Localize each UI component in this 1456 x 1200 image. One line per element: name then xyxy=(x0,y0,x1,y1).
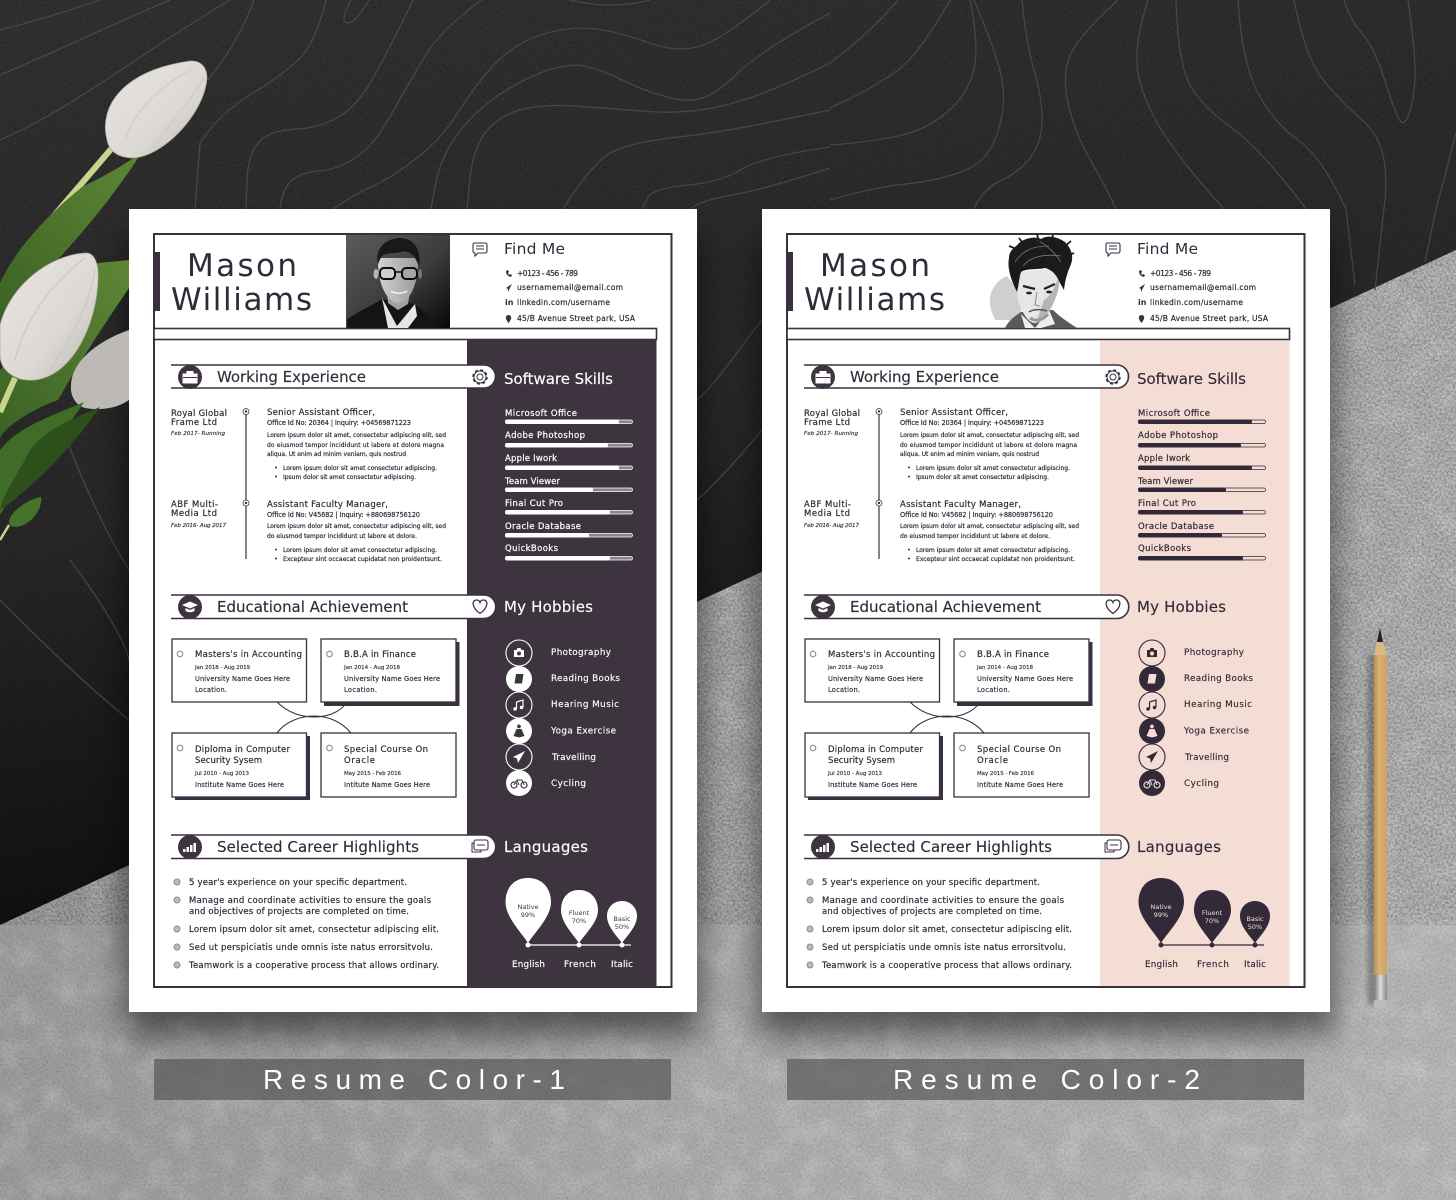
education card: special course: May 2015 - Feb 2016 xyxy=(977,771,1034,777)
language pins chart: 99% xyxy=(521,911,535,919)
hobbies list: Yoga Exercise xyxy=(550,726,616,736)
education card: bba: B.B.A in Finance xyxy=(977,650,1049,660)
experience timeline xyxy=(243,408,249,559)
language pins chart: Italic xyxy=(1244,960,1266,970)
education card: masters: Jan 2018 - Aug 2019 xyxy=(194,665,250,671)
experience entry 2: Lorem ipsum dolor sit amet, consectetur adipiscing elit, sed xyxy=(900,523,1079,530)
caption: resume color 1 xyxy=(154,1059,671,1100)
heading: languages: Languages xyxy=(1137,838,1221,856)
education card: masters: Masters's in Accounting xyxy=(828,650,935,660)
skills list: Apple Iwork xyxy=(1138,454,1190,464)
illustration: pencil xyxy=(1368,628,1387,1008)
experience entry 2: ABF Multi- xyxy=(171,500,218,510)
heading: my hobbies: My Hobbies xyxy=(504,598,593,616)
language pins chart: Basic xyxy=(1246,915,1264,923)
education card: special course: Oracle xyxy=(344,756,375,766)
hobbies list: Photography xyxy=(551,648,611,658)
header strip xyxy=(154,328,656,340)
header strip xyxy=(787,328,1290,340)
linkedin url: linkedin.com/username xyxy=(517,298,610,307)
section bar: career highlights xyxy=(171,835,496,859)
phone number: +0123 - 456 - 789 xyxy=(517,269,578,278)
background: dark textured diagonal xyxy=(0,0,1456,925)
heading: languages: Languages xyxy=(504,838,588,856)
education connectors xyxy=(277,702,351,733)
education card: special course xyxy=(321,733,456,797)
education card: bba: Jan 2014 - Aug 2018 xyxy=(343,665,400,671)
career highlights list: and objectives of projects are completed on time. xyxy=(189,907,409,917)
heading: find me: Find Me xyxy=(504,240,565,258)
skills list xyxy=(1137,409,1266,560)
language pins chart xyxy=(506,878,637,970)
education card: masters: Jan 2018 - Aug 2019 xyxy=(827,665,884,671)
experience entry 1: Frame Ltd xyxy=(171,418,217,428)
caption: resume color 1: Resume Color-1 xyxy=(263,1064,565,1095)
icon: speech bubble xyxy=(473,243,487,256)
icon: location pin xyxy=(506,315,511,323)
language pins chart: English xyxy=(512,960,545,970)
language pins chart: Native xyxy=(1150,903,1172,911)
icon: send xyxy=(1139,284,1145,292)
language pins chart: 70% xyxy=(572,917,586,925)
icon: speech bubble xyxy=(1106,243,1120,256)
language pins chart: 99% xyxy=(1154,911,1168,919)
skills list: Microsoft Office xyxy=(505,409,577,419)
skills list: Team Viewer xyxy=(504,477,560,487)
icon: phone xyxy=(506,270,512,277)
education card: diploma: Security Sysem xyxy=(195,756,262,766)
skills list: Final Cut Pro xyxy=(505,499,563,509)
education card: masters: Masters's in Accounting xyxy=(195,650,302,660)
paper xyxy=(129,209,697,1012)
experience entry 1 xyxy=(804,408,1079,481)
experience entry 2: do eiusmod tempor incididunt ut labore et dolore. xyxy=(267,533,417,540)
experience entry 2: Lorem ipsum dolor sit amet consectetur adipiscing. xyxy=(916,547,1070,554)
experience entry 2: ABF Multi- xyxy=(804,500,851,510)
career highlights list: Lorem ipsum dolor sit amet, consectetur adipiscing elit. xyxy=(189,925,439,935)
career highlights list: 5 year's experience on your specific department. xyxy=(189,878,407,888)
name: Mason xyxy=(187,248,297,284)
experience entry 1: Senior Assistant Officer, xyxy=(267,408,375,418)
section bar: working experience: Working Experience xyxy=(850,368,999,386)
section bar: working experience xyxy=(171,365,496,389)
skills list: Oracle Database xyxy=(1138,522,1214,532)
experience entry 2: Media Ltd xyxy=(171,509,217,519)
language pins chart: French xyxy=(1197,960,1229,970)
experience entry 2 xyxy=(171,500,446,563)
experience entry 2: Office Id No: V45682 | Inquiry: +880698756120 xyxy=(267,511,420,519)
hobbies list: Reading Books xyxy=(551,674,620,684)
hobbies list xyxy=(506,640,620,796)
skills list: Final Cut Pro xyxy=(1138,499,1196,509)
language pins chart: Italic xyxy=(611,960,633,970)
education card: special course: Special Course On xyxy=(344,745,428,755)
experience entry 1: Office Id No: 20364 | Inquiry: +04569871223 xyxy=(267,419,411,427)
experience entry 2: Assistant Faculty Manager, xyxy=(267,500,388,510)
icon: send xyxy=(506,284,512,292)
education card: masters: University Name Goes Here xyxy=(195,675,290,683)
education card: bba: University Name Goes Here xyxy=(977,675,1073,683)
language pins chart: English xyxy=(1145,960,1178,970)
name: Williams xyxy=(804,282,945,318)
language pins chart: Basic xyxy=(613,915,631,923)
skills list: Oracle Database xyxy=(505,522,581,532)
icon: linkedin: in xyxy=(505,298,514,307)
hobbies list: Cycling xyxy=(551,779,586,789)
education connectors xyxy=(910,702,984,733)
experience entry 1: Senior Assistant Officer, xyxy=(900,408,1008,418)
caption: resume color 2: Resume Color-2 xyxy=(893,1064,1200,1095)
section bar: working experience: Working Experience xyxy=(217,368,366,386)
education card: diploma: Diploma in Computer xyxy=(195,745,290,755)
education card: special course: Oracle xyxy=(977,756,1008,766)
resume 1: dark colour version xyxy=(129,209,697,1012)
experience entry 1: do eiusmod tempor incididunt ut labore et dolore magna xyxy=(900,442,1077,449)
side panel xyxy=(467,340,656,987)
education card: bba: Jan 2014 - Aug 2018 xyxy=(976,665,1034,671)
experience entry 2: Office Id No: V45682 | Inquiry: +880698756120 xyxy=(900,511,1053,519)
skills list xyxy=(504,409,632,560)
heading: software skills: Software Skills xyxy=(504,370,613,388)
experience entry 1: Office Id No: 20364 | Inquiry: +04569871223 xyxy=(900,419,1044,427)
education card: bba: Location. xyxy=(344,686,377,694)
section bar: educational achievement: Educational Achievement xyxy=(850,598,1041,616)
portrait photo xyxy=(990,234,1077,328)
education card: bba: B.B.A in Finance xyxy=(344,650,416,660)
resume 2: pink colour version xyxy=(762,209,1330,1012)
icon: location pin xyxy=(1139,315,1144,323)
contact panel xyxy=(1106,240,1269,323)
icon: linkedin: in xyxy=(1138,298,1147,307)
language pins chart: 70% xyxy=(1205,917,1219,925)
language pins chart: 50% xyxy=(615,923,629,931)
experience entry 1: Royal Global xyxy=(804,409,860,419)
career highlights list: Manage and coordinate activities to ensure the goals xyxy=(822,896,1065,906)
caption: resume color 2 xyxy=(787,1059,1304,1100)
education card: bba: Location. xyxy=(977,686,1010,694)
language pins chart: Fluent xyxy=(1202,909,1223,917)
career highlights list: 5 year's experience on your specific department. xyxy=(822,878,1040,888)
icon: phone xyxy=(1139,270,1145,277)
career highlights list: and objectives of projects are completed on time. xyxy=(822,907,1042,917)
section bar: career highlights: Selected Career Highlights xyxy=(217,838,419,856)
section bar: educational achievement: Educational Achievement xyxy=(217,598,408,616)
section bar: career highlights xyxy=(804,835,1129,859)
skills list: Adobe Photoshop xyxy=(505,431,585,441)
experience entry 1: Frame Ltd xyxy=(804,418,850,428)
education card: masters: University Name Goes Here xyxy=(828,675,923,683)
experience entry 2: do eiusmod tempor incididunt ut labore et dolore. xyxy=(900,533,1050,540)
address: 45/B Avenue Street park, USA xyxy=(517,314,636,323)
heading: find me: Find Me xyxy=(1137,240,1198,258)
outer frame xyxy=(787,234,1304,987)
education card: special course: May 2015 - Feb 2016 xyxy=(344,771,402,777)
education card: masters: Location. xyxy=(195,686,227,694)
education card: bba xyxy=(321,639,460,706)
education card: special course: Intitute Name Goes Here xyxy=(344,781,430,789)
illustration: white tulips xyxy=(0,61,207,540)
experience entry 2: Excepteur sint occaecat cupidatat non proidentsunt. xyxy=(916,556,1075,563)
experience entry 1: Lorem ipsum dolor sit amet consectetur adipiscing. xyxy=(283,465,437,472)
experience entry 2: Feb 2016- Aug 2017 xyxy=(171,523,226,529)
career highlights list: Teamwork is a cooperative process that allows ordinary. xyxy=(821,961,1072,971)
career highlights list: Teamwork is a cooperative process that allows ordinary. xyxy=(188,961,439,971)
education card: special course: Special Course On xyxy=(977,745,1061,755)
education card: diploma: Institute Name Goes Here xyxy=(195,781,284,789)
hobbies list: Hearing Music xyxy=(1184,700,1252,710)
side panel xyxy=(1100,341,1290,986)
hobbies list: Reading Books xyxy=(1184,674,1253,684)
experience entry 1: Lorem ipsum dolor sit amet, consectetur adipiscing elit, sed xyxy=(267,432,446,439)
experience entry 2: Assistant Faculty Manager, xyxy=(900,500,1021,510)
outer frame xyxy=(154,234,672,987)
portrait photo xyxy=(346,235,450,328)
email: usernamemail@email.com xyxy=(1150,283,1256,292)
phone number: +0123 - 456 - 789 xyxy=(1150,269,1211,278)
hobbies list: Yoga Exercise xyxy=(1183,726,1249,736)
education card: diploma xyxy=(805,733,943,800)
section bar: educational achievement xyxy=(804,595,1129,619)
experience entry 1: Ipsum dolor sit amet consectetur adipiscing. xyxy=(283,474,416,481)
hobbies list: Hearing Music xyxy=(551,700,619,710)
skills list: QuickBooks xyxy=(505,544,559,554)
hobbies list: Cycling xyxy=(1184,779,1219,789)
education card: bba xyxy=(954,639,1092,706)
education card: masters: Location. xyxy=(828,686,860,694)
language pins chart: Fluent xyxy=(569,909,590,917)
heading: software skills: Software Skills xyxy=(1137,370,1246,388)
skills list: QuickBooks xyxy=(1138,544,1192,554)
experience entry 1: Feb 2017- Running xyxy=(804,431,858,437)
career highlights list: Sed ut perspiciatis unde omnis iste natus errorsitvolu. xyxy=(189,943,433,953)
hobbies list: Photography xyxy=(1184,648,1244,658)
paper shadows xyxy=(125,240,1334,1035)
email: usernamemail@email.com xyxy=(517,283,623,292)
hobbies list: Travelling xyxy=(551,753,596,763)
language pins chart: 50% xyxy=(1248,923,1262,931)
section bar: career highlights: Selected Career Highlights xyxy=(850,838,1052,856)
language pins chart: French xyxy=(564,960,596,970)
education card: special course xyxy=(954,733,1089,797)
education card: diploma: Diploma in Computer xyxy=(828,745,924,755)
education card: diploma: Jul 2010 - Aug 2013 xyxy=(827,771,882,777)
experience entry 2: Media Ltd xyxy=(804,509,850,519)
experience entry 1: Royal Global xyxy=(171,409,227,419)
name: Williams xyxy=(171,282,312,318)
experience entry 1: Lorem ipsum dolor sit amet consectetur adipiscing. xyxy=(916,465,1070,472)
name xyxy=(804,248,945,318)
experience entry 1: do eiusmod tempor incididunt ut labore et dolore magna xyxy=(267,442,444,449)
address: 45/B Avenue Street park, USA xyxy=(1150,314,1269,323)
education card: special course: Intitute Name Goes Here xyxy=(977,781,1063,789)
section bar: educational achievement xyxy=(171,595,496,619)
education card: diploma xyxy=(172,733,310,800)
experience entry 1 xyxy=(171,408,446,481)
career highlights list xyxy=(807,878,1072,971)
language pins chart xyxy=(1138,878,1270,970)
experience entry 1: aliqua. Ut enim ad minim veniam, quis nostrud xyxy=(267,451,406,458)
experience entry 1: aliqua. Ut enim ad minim veniam, quis nostrud xyxy=(900,451,1039,458)
name: Mason xyxy=(820,248,930,284)
paper xyxy=(762,209,1330,1012)
hobbies list: Travelling xyxy=(1184,753,1229,763)
education card: diploma: Jul 2010 - Aug 2013 xyxy=(194,771,250,777)
section bar: working experience xyxy=(804,365,1128,389)
experience entry 1: Feb 2017- Running xyxy=(171,431,225,437)
education card: diploma: Security Sysem xyxy=(828,756,895,766)
career highlights list: Manage and coordinate activities to ensure the goals xyxy=(189,896,432,906)
contact panel xyxy=(473,240,636,323)
language pins chart: Native xyxy=(517,903,539,911)
experience entry 1: Lorem ipsum dolor sit amet, consectetur adipiscing elit, sed xyxy=(900,432,1079,439)
experience entry 1: Ipsum dolor sit amet consectetur adipiscing. xyxy=(916,474,1049,481)
career highlights list: Lorem ipsum dolor sit amet, consectetur adipiscing elit. xyxy=(822,925,1072,935)
experience timeline xyxy=(876,408,882,559)
skills list: Team Viewer xyxy=(1137,477,1194,487)
career highlights list: Sed ut perspiciatis unde omnis iste natus errorsitvolu. xyxy=(822,943,1066,953)
name accent bar xyxy=(155,252,160,311)
education card: bba: University Name Goes Here xyxy=(344,675,440,683)
experience entry 2: Excepteur sint occaecat cupidatat non proidentsunt. xyxy=(283,556,442,563)
experience entry 2: Feb 2016- Aug 2017 xyxy=(804,523,859,529)
name xyxy=(171,248,312,318)
skills list: Apple Iwork xyxy=(505,454,557,464)
skills list: Adobe Photoshop xyxy=(1138,431,1218,441)
experience entry 2 xyxy=(804,500,1079,563)
education card: diploma: Institute Name Goes Here xyxy=(828,781,917,789)
name accent bar xyxy=(788,252,793,311)
education card: masters xyxy=(805,639,940,702)
career highlights list xyxy=(174,878,439,971)
heading: my hobbies: My Hobbies xyxy=(1137,598,1226,616)
skills list: Microsoft Office xyxy=(1138,409,1210,419)
experience entry 2: Lorem ipsum dolor sit amet consectetur adipiscing. xyxy=(283,547,437,554)
hobbies list xyxy=(1139,640,1253,796)
experience entry 2: Lorem ipsum dolor sit amet, consectetur adipiscing elit, sed xyxy=(267,523,446,530)
education card: masters xyxy=(172,639,306,702)
linkedin url: linkedin.com/username xyxy=(1150,298,1243,307)
